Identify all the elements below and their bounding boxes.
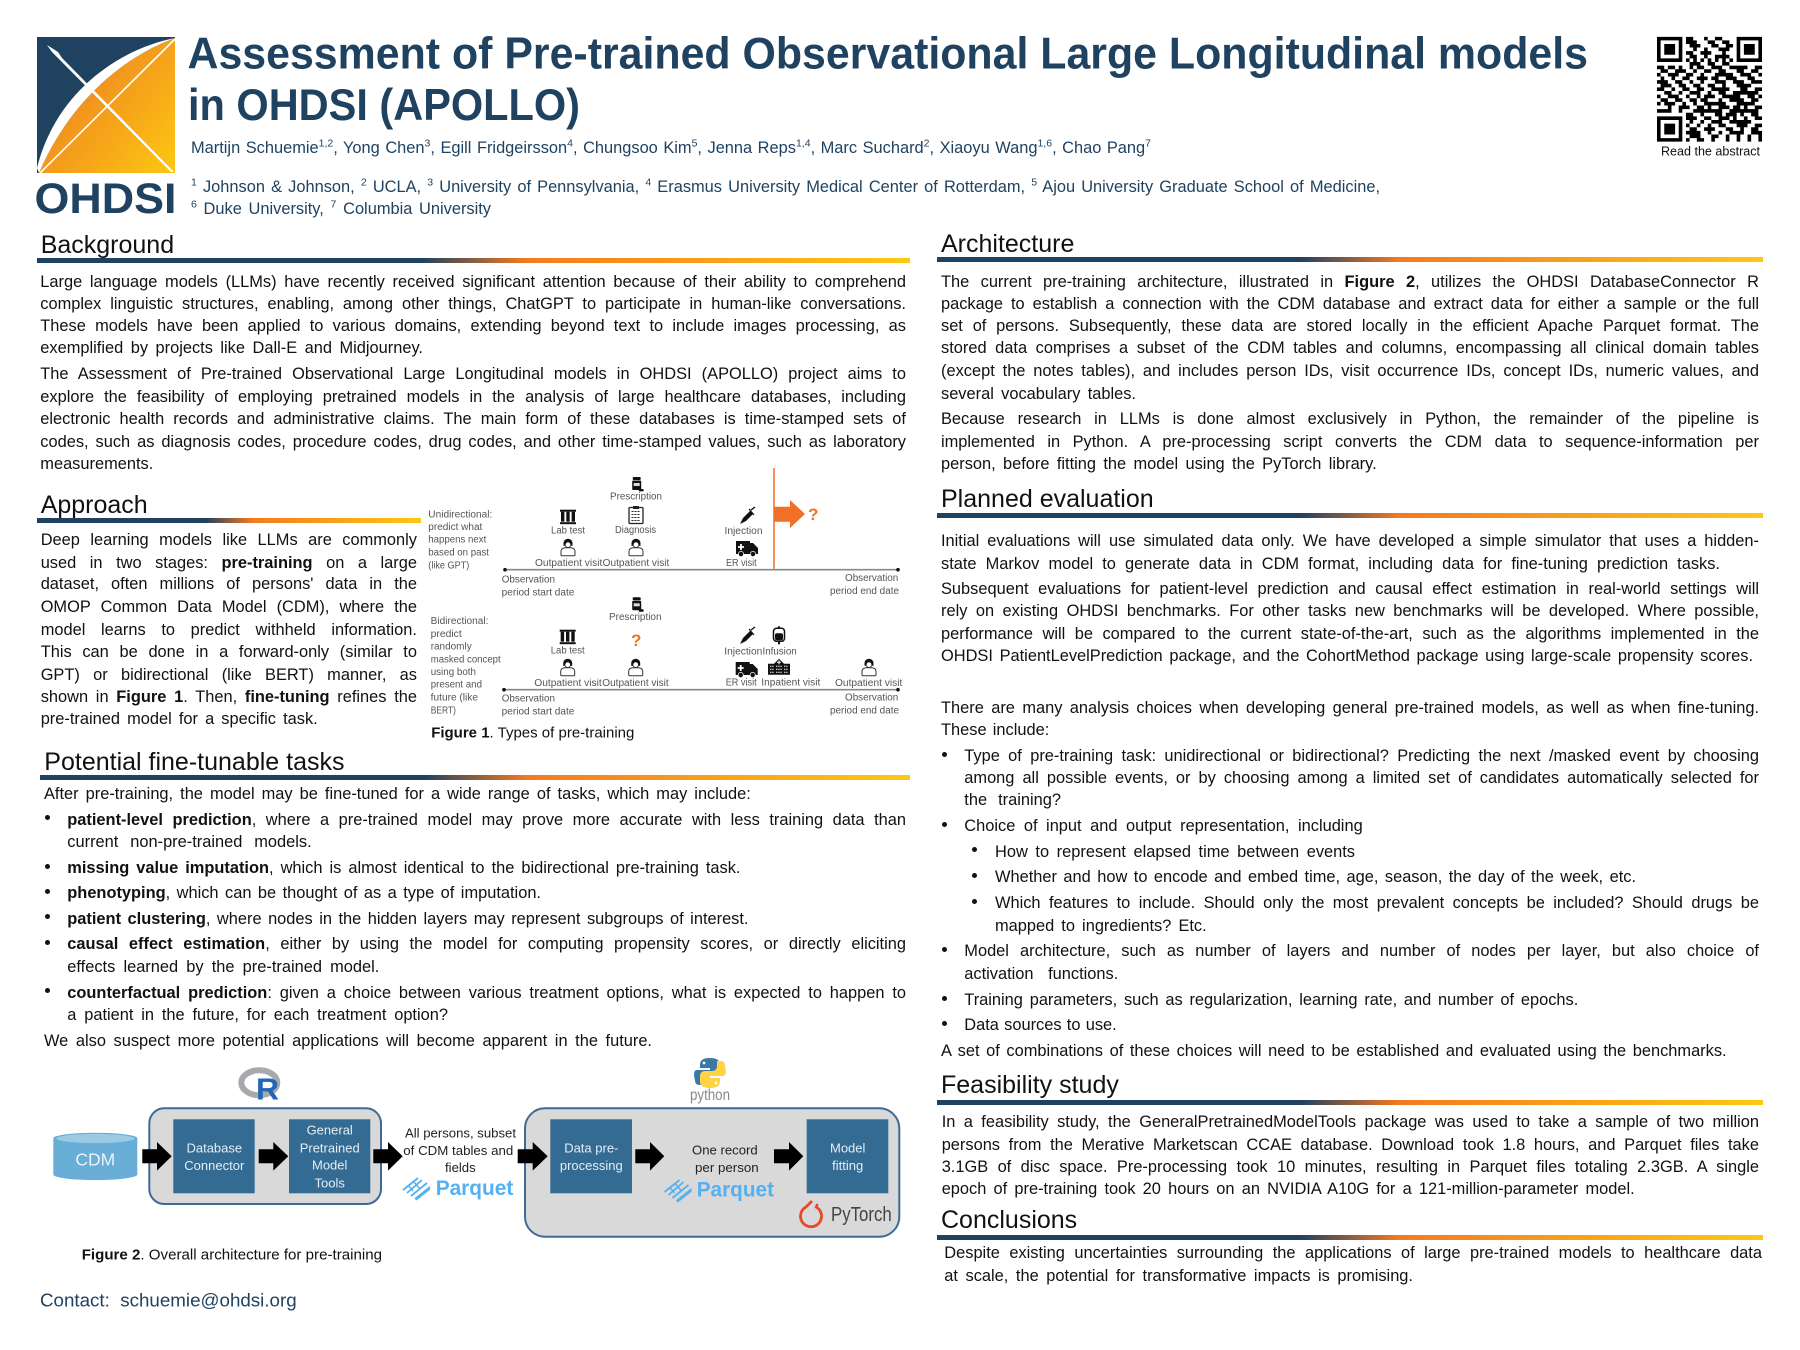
bidirectional description: present and <box>431 680 482 691</box>
bidirectional events: Outpatient visit <box>835 678 903 689</box>
logo: OHDSI: OHDSI <box>34 175 176 223</box>
text: Planned evaluation: There are many analysis choices when developing general pre-trained models, as well as when fine-tuning. <box>941 699 1759 717</box>
text: Approach: GPT) or bidirectional (like BERT) manner, as <box>41 666 417 684</box>
bidirectional timeline: period end date <box>830 705 899 716</box>
unidirectional timeline: Observation <box>502 575 555 586</box>
bidirectional description: using both <box>431 667 476 678</box>
bidirectional description: predict <box>431 629 462 640</box>
box: Database Connector <box>173 1119 255 1193</box>
bidirectional timeline: Observation <box>845 693 898 704</box>
data description and parquet logo: of CDM tables and <box>403 1143 513 1158</box>
data description and parquet logo: fields <box>445 1160 476 1175</box>
bidirectional description: BERT) <box>431 705 456 716</box>
text: Approach: Deep learning models like LLMs are commonly <box>41 531 417 549</box>
text: Background: exemplified by projects like Dall-E and Midjourney. <box>40 339 423 357</box>
box: General Pretrained Model Tools: Tools <box>315 1175 345 1190</box>
text: Planned evaluation: Data sources to use. <box>964 1016 1117 1034</box>
text: Background: codes, such as diagnosis codes, procedure codes, drug codes, and other time-stamped values, such as laboratory <box>40 433 906 451</box>
unidirectional description <box>428 509 492 571</box>
heading: Planned evaluation <box>937 485 1763 518</box>
text: fine-tunable task list <box>44 785 906 1050</box>
box: General Pretrained Model Tools: General <box>307 1123 353 1138</box>
bidirectional description: Bidirectional: <box>431 616 488 627</box>
text: Planned evaluation: Subsequent evaluations for patient-level prediction and causal effect estimation in real-world settings will <box>941 580 1759 598</box>
affiliations: 1 Johnson & Johnson, 2 UCLA, 3 University of Pennsylvania, 4 Erasmus University Medical Center of Rotterdam, 5 Ajou University Graduate School of Medicine, <box>191 176 1380 196</box>
text: Approach: used in two stages: pre-training on a large <box>41 554 417 572</box>
bidirectional events: ? <box>631 631 641 650</box>
data description and parquet logo: All persons, subset <box>405 1125 516 1140</box>
text: fine-tunable task list: After pre-training, the model may be fine-tuned for a wide range of tasks, which may include: <box>44 785 751 803</box>
author list: Martijn Schuemie1,2, Yong Chen3, Egill Fridgeirsson4, Chungsoo Kim5, Jenna Reps1,4, Marc Suchard2, Xiaoyu Wang1,6, Chao Pang7 <box>191 137 1151 157</box>
affiliations <box>191 176 1380 218</box>
box: Model fitting: fitting <box>832 1158 863 1173</box>
unidirectional timeline: period end date <box>830 586 899 597</box>
bidirectional events: Infusion <box>762 646 797 657</box>
text: Planned evaluation: Initial evaluations will use simulated data only. We have developed a simple simulator that uses a hidden- <box>941 532 1759 550</box>
unidirectional events: Lab test <box>551 525 585 536</box>
box: Database Connector: Database <box>186 1140 242 1155</box>
per-person record and parquet logo: Parquet <box>697 1179 774 1202</box>
bidirectional events: Outpatient visit <box>534 678 602 689</box>
text: Background: Large language models (LLMs) have recently received significant attention because of their ability to comprehend <box>40 273 906 291</box>
text: Planned evaluation: rely on existing OHDSI benchmarks. For other tasks new benchmarks will be developed. Where possible, <box>941 602 1759 620</box>
text: Conclusions <box>944 1244 1762 1285</box>
text: Planned evaluation: A set of combinations of these choices will need to be established and evaluated using the benchmarks. <box>941 1042 1727 1060</box>
unidirectional description: (like GPT) <box>428 560 469 571</box>
text: fine-tunable task list: counterfactual prediction: given a choice between various treatment options, what is expected to happen to <box>67 984 906 1002</box>
box: General Pretrained Model Tools: Pretrained <box>300 1140 360 1155</box>
bidirectional events: ER visit <box>726 678 757 689</box>
text: Architecture: implemented in Python. A pre-processing script converts the CDM data to sequence-information per <box>941 433 1759 451</box>
text: fine-tunable task list: effects learned by the pre-trained model. <box>67 958 379 976</box>
title: in OHDSI (APOLLO) <box>188 81 580 130</box>
bidirectional events: Injection <box>724 646 762 657</box>
text: Planned evaluation: Choice of input and output representation, including <box>964 817 1363 835</box>
box: Model fitting: Model <box>830 1140 866 1155</box>
text: Architecture <box>941 273 1759 473</box>
text: Architecture: set of persons. Subsequently, these data are stored locally in the efficient Apache Parquet format. The <box>941 317 1759 335</box>
heading: Background: Background <box>41 231 174 259</box>
text: fine-tunable task list: missing value imputation, which is almost identical to the bidirectional pre-training task. <box>67 859 740 877</box>
text: Planned evaluation: among all possible events, or by choosing among a limited set of candidates automatically selected for <box>964 769 1759 787</box>
unidirectional timeline: Observation <box>845 573 898 584</box>
unidirectional description: happens next <box>428 535 487 546</box>
box: Database Connector: Connector <box>184 1158 245 1173</box>
text: Planned evaluation: OHDSI PatientLevelPrediction package, and the CohortMethod package using large-scale propensity scores. <box>941 647 1753 665</box>
figure 2: overall architecture <box>53 1058 899 1263</box>
CDM database cylinder: CDM <box>75 1150 115 1170</box>
heading: Architecture <box>937 230 1763 262</box>
text: Planned evaluation: Which features to include. Should only the most prevalent concepts be included? Should drugs be <box>995 894 1759 912</box>
title: Assessment of Pre-trained Observational Large Longitudinal models <box>188 30 1588 79</box>
text: Approach: dataset, often millions of persons' data in the <box>41 575 417 593</box>
text: Background: These models have been applied to various domains, extending beyond text to include images processing, as <box>40 317 906 335</box>
heading: Feasibility study <box>937 1071 1763 1105</box>
unidirectional events <box>535 477 762 569</box>
text: Approach: This can be done in a forward-only (similar to <box>41 643 417 661</box>
icon: python logo: python <box>690 1087 730 1104</box>
unidirectional description: based on past <box>428 548 489 559</box>
text: Approach: shown in Figure 1. Then, fine-tuning refines the <box>41 688 417 706</box>
per-person record and parquet logo <box>664 1142 774 1202</box>
box: Model fitting <box>807 1119 888 1193</box>
text: Feasibility study <box>942 1113 1759 1198</box>
R tools container <box>149 1108 381 1204</box>
text: Conclusions: Despite existing uncertainties surrounding the applications of large pre-trained models to healthcare data <box>944 1244 1762 1262</box>
heading: Feasibility study: Feasibility study <box>941 1071 1119 1099</box>
text: Planned evaluation: Type of pre-training task: unidirectional or bidirectional? Predicting the next /masked event by choosing <box>964 747 1759 765</box>
contact: Contact: schuemie@ohdsi.org <box>40 1290 297 1311</box>
text: Background: complex linguistic structures, enabling, among other things, ChatGPT to participate in human-like conversations. <box>40 295 906 313</box>
heading: Architecture: Architecture <box>941 230 1074 258</box>
text: Architecture: Because research in LLMs is done almost exclusively in Python, the remainder of the pipeline is <box>941 410 1759 428</box>
icon: R logo <box>241 1070 279 1106</box>
data description and parquet logo: Parquet <box>436 1177 513 1200</box>
figure 2 caption: Figure 2. Overall architecture for pre-training <box>82 1246 382 1263</box>
logo: OHDSI <box>34 37 176 223</box>
PyTorch logo: PyTorch <box>831 1204 892 1226</box>
text: Approach: OMOP Common Data Model (CDM), where the <box>41 598 417 616</box>
text: Architecture: stored data comprises a subset of the CDM tables and columns, encompassing all clinical domain tables <box>941 339 1759 357</box>
figure 1 caption: Figure 1. Types of pre-training <box>431 724 634 741</box>
unidirectional events: Diagnosis <box>615 525 656 536</box>
text: Approach: model learns to predict withheld information. <box>41 621 417 639</box>
heading: Background <box>37 231 910 263</box>
bidirectional description <box>431 616 501 716</box>
text: fine-tunable task list: patient-level prediction, where a pre-trained model may prove more accurate with less training data than <box>67 811 906 829</box>
bidirectional events: Prescription <box>609 612 662 623</box>
text: Planned evaluation: Training parameters, such as regularization, learning rate, and number of epochs. <box>964 991 1578 1009</box>
text: Background: explore the feasibility of employing pretrained models in the analysis of large healthcare databases, including <box>40 388 906 406</box>
prediction cutoff arrow <box>774 468 818 569</box>
unidirectional description: Unidirectional: <box>428 509 492 520</box>
text: Planned evaluation <box>941 532 1759 1060</box>
text: Architecture: package to establish a connection with the CDM database and extract data for either a sample or the full <box>941 295 1759 313</box>
text: Planned evaluation: state Markov model to generate data in CDM format, including data for fine-tuning prediction tasks. <box>941 555 1720 573</box>
box: General Pretrained Model Tools: Model <box>312 1158 348 1173</box>
bidirectional description: masked concept <box>431 654 501 665</box>
text: fine-tunable task list: We also suspect more potential applications will become apparent in the future. <box>44 1032 652 1050</box>
text: Planned evaluation: How to represent elapsed time between events <box>995 843 1355 861</box>
box: Data pre-processing <box>550 1119 632 1193</box>
text: Architecture: person, before fitting the model using the PyTorch library. <box>941 455 1377 473</box>
text: Planned evaluation: Whether and how to encode and embed time, age, season, the day of the week, etc. <box>995 868 1636 886</box>
unidirectional description: predict what <box>428 522 483 533</box>
unidirectional events: Injection <box>724 526 762 537</box>
unidirectional timeline <box>502 568 900 599</box>
unidirectional events: Prescription <box>610 491 662 502</box>
title <box>188 30 1588 130</box>
text: Planned evaluation: the training? <box>964 791 1061 809</box>
text: Architecture: several vocabulary tables. <box>941 385 1136 403</box>
per-person record and parquet logo: One record <box>692 1142 758 1157</box>
QR code <box>1657 39 1762 159</box>
bidirectional timeline: Observation <box>502 694 555 705</box>
PyTorch logo <box>801 1201 892 1227</box>
text: Feasibility study: In a feasibility study, the GeneralPretrainedModelTools package was used to take a sample of two million <box>942 1113 1759 1131</box>
bidirectional timeline: period start date <box>502 706 575 717</box>
text: Planned evaluation: Model architecture, such as number of layers and number of nodes per layer, but also choice of <box>964 942 1759 960</box>
text: Architecture: (except the notes tables), and includes person IDs, visit occurrence IDs, concept IDs, numeric values, and <box>941 362 1759 380</box>
CDM database cylinder <box>53 1133 137 1180</box>
bidirectional events: Outpatient visit <box>602 678 669 689</box>
heading: Potential fine-tunable tasks <box>40 748 910 780</box>
text: Background: electronic health records and administrative claims. The main form of these databases is time-stamped sets of <box>40 410 906 428</box>
text: Background: The Assessment of Pre-trained Observational Large Longitudinal models in OHDSI (APOLLO) project aims to <box>40 365 906 383</box>
heading: Conclusions <box>937 1206 1763 1240</box>
text: Background: measurements. <box>40 455 153 473</box>
unidirectional events: ER visit <box>726 558 757 569</box>
text: Planned evaluation: These include: <box>941 721 1049 739</box>
Python tools container <box>525 1108 899 1237</box>
text: Feasibility study: epoch of pre-training took 20 hours on an NVIDIA A10G for a 121-million-parameter model. <box>942 1180 1635 1198</box>
bidirectional description: randomly <box>431 641 472 652</box>
heading: Approach <box>37 491 421 523</box>
figure 1: types of pre-training <box>428 468 903 741</box>
text: fine-tunable task list: causal effect estimation, either by using the model for computing propensity scores, or directly eliciting <box>67 935 906 953</box>
data description and parquet logo <box>403 1125 516 1200</box>
bidirectional events: Inpatient visit <box>761 678 821 689</box>
unidirectional events: Outpatient visit <box>535 558 603 569</box>
unidirectional events: Outpatient visit <box>603 558 670 569</box>
bidirectional description: future (like <box>431 692 478 703</box>
text: Planned evaluation: activation functions. <box>964 965 1118 983</box>
icon: python logo <box>690 1058 730 1104</box>
text: Background <box>40 273 906 473</box>
text: Approach <box>41 531 417 728</box>
arrows <box>142 1142 803 1171</box>
bidirectional timeline <box>502 688 900 717</box>
per-person record and parquet logo: per person <box>695 1160 759 1175</box>
bidirectional events <box>534 597 903 689</box>
text: Conclusions: at scale, the potential for transformative impacts is promising. <box>944 1267 1413 1285</box>
affiliations: 6 Duke University, 7 Columbia University <box>191 198 491 218</box>
box: Data pre-processing: processing <box>560 1158 623 1173</box>
text: Feasibility study: 3.1GB of disc space. Pre-processing took 10 minutes, resulting in Parquet files totaling 2.3GB. A single <box>942 1158 1759 1176</box>
text: fine-tunable task list: a patient in the future, for each treatment option? <box>67 1006 448 1024</box>
heading: Potential fine-tunable tasks: Potential fine-tunable tasks <box>44 748 344 776</box>
box: Data pre-processing: Data pre- <box>564 1140 618 1155</box>
text: Feasibility study: persons from the Merative Marketscan CCAE database. Download took 1.8 hours, and Parquet files take <box>942 1136 1759 1154</box>
text: Architecture: The current pre-training architecture, illustrated in Figure 2, utilizes the OHDSI DatabaseConnector R <box>941 273 1759 291</box>
QR code: Read the abstract <box>1661 145 1761 159</box>
text: Planned evaluation: mapped to ingredients? Etc. <box>995 917 1207 935</box>
unidirectional timeline: period start date <box>502 588 575 599</box>
heading: Approach: Approach <box>41 491 148 519</box>
text: fine-tunable task list: current non-pre-trained models. <box>67 833 312 851</box>
text: fine-tunable task list: phenotyping, which can be thought of as a type of imputation. <box>67 884 541 902</box>
icon: R logo: R <box>256 1071 279 1106</box>
heading: Conclusions: Conclusions <box>941 1206 1077 1234</box>
text: Approach: pre-trained model for a specific task. <box>41 710 318 728</box>
bidirectional events: Lab test <box>551 646 585 657</box>
text: fine-tunable task list: patient clustering, where nodes in the hidden layers may represent subgroups of interest. <box>67 910 748 928</box>
text: Planned evaluation: performance will be compared to the current state-of-the-art, such as the algorithms implemented in the <box>941 625 1759 643</box>
box: General Pretrained Model Tools <box>289 1119 370 1193</box>
heading: Planned evaluation: Planned evaluation <box>941 485 1154 513</box>
prediction cutoff arrow: ? <box>808 505 818 524</box>
